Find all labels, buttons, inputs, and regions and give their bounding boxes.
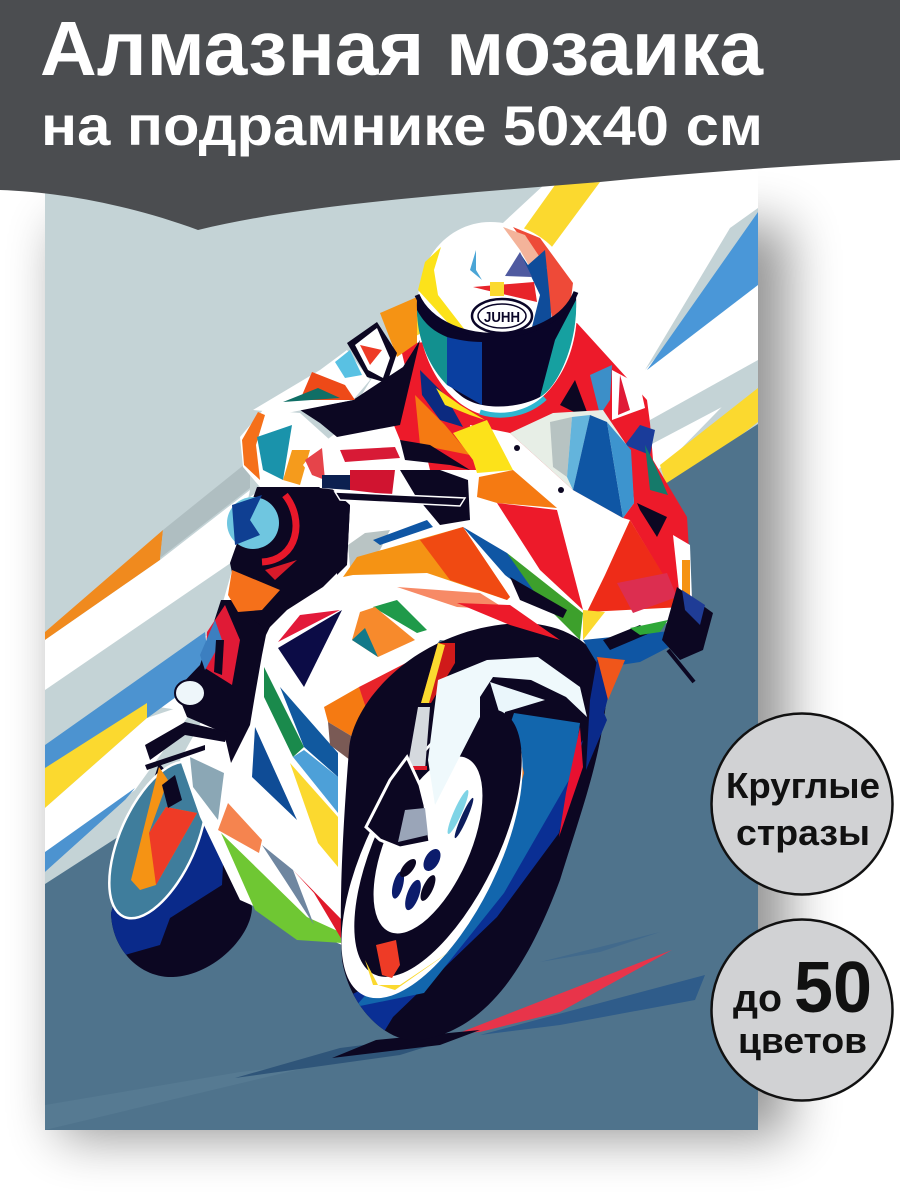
lower leg and boot — [145, 600, 283, 770]
canvas drop shadow — [60, 225, 788, 1137]
panel: artwork canvas — [45, 170, 758, 1130]
title: Алмазная мозаика — [40, 6, 764, 92]
ground streak — [459, 950, 672, 1033]
knee and thigh — [227, 487, 350, 630]
badge: round rhinestones — [712, 714, 892, 894]
right glove — [662, 587, 713, 682]
left glove and handlebar — [303, 440, 470, 575]
helmet logo — [472, 299, 532, 333]
left arm and shoulder — [240, 297, 420, 493]
fairing and windscreen — [343, 410, 692, 770]
badge: round rhinestones: Круглые — [726, 765, 880, 806]
motorcycle and rider illustration — [89, 222, 713, 1058]
badge: up to 50 colours: до — [733, 978, 782, 1020]
rear wheel — [108, 761, 252, 977]
badge: up to 50 colours: 50 — [794, 948, 872, 1028]
header banner — [0, 0, 900, 230]
rider torso and right arm — [393, 323, 692, 600]
front fender and fork — [366, 643, 587, 848]
helmet logo: JUHH — [484, 309, 520, 326]
front wheel — [340, 624, 606, 1038]
helmet — [417, 222, 577, 420]
badge: up to 50 colours: цветов — [738, 1020, 867, 1061]
motorcycle body — [180, 589, 670, 945]
visor — [417, 292, 576, 407]
subtitle: на подрамнике 50х40 см — [41, 94, 763, 157]
badge: up to 50 colours — [712, 920, 892, 1100]
artwork background — [45, 170, 758, 1130]
badge: round rhinestones: стразы — [736, 812, 870, 853]
wheel shadow — [332, 1030, 480, 1058]
